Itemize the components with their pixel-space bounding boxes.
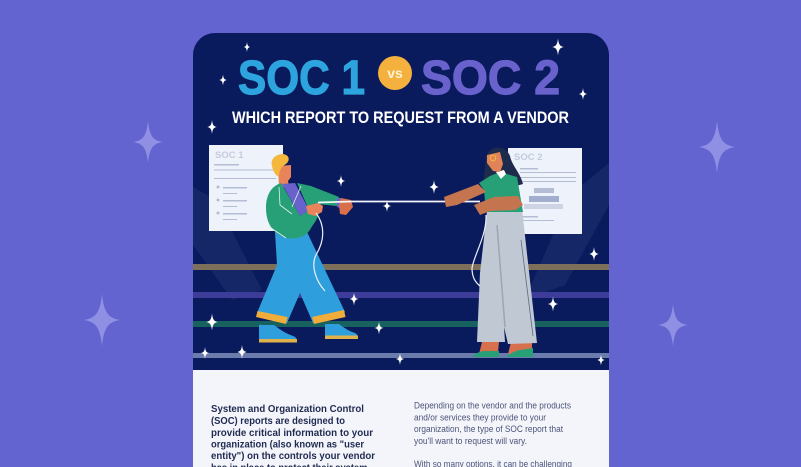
title: SOC 2: SOC 2 bbox=[421, 51, 560, 105]
subtitle: WHICH REPORT TO REQUEST FROM A VENDOR bbox=[232, 109, 569, 127]
glasses bbox=[490, 155, 496, 161]
hands bbox=[306, 203, 323, 216]
report card: SOC 2 bbox=[508, 148, 582, 234]
jeans bbox=[257, 232, 345, 323]
intro right paragraphs: you'll want to request will vary. bbox=[414, 436, 527, 446]
hair back bbox=[483, 148, 523, 186]
light beams bbox=[193, 163, 609, 300]
title: SOC 1: SOC 1 bbox=[238, 51, 365, 105]
intro right paragraphs: Depending on the vendor and the products bbox=[414, 400, 571, 410]
intro bold paragraph: (SOC) reports are designed to bbox=[211, 415, 345, 427]
panel: intro body bbox=[193, 370, 609, 467]
card bbox=[193, 33, 609, 467]
vs badge: vs bbox=[387, 65, 403, 81]
purple cuff bbox=[337, 198, 341, 208]
purple shirt bbox=[282, 183, 309, 216]
intro right paragraphs bbox=[414, 400, 572, 467]
report card: SOC 2: SOC 2 bbox=[514, 152, 543, 163]
arms bbox=[444, 184, 486, 207]
vs badge bbox=[378, 56, 412, 90]
hair bbox=[272, 154, 289, 177]
panel: hero navy bbox=[193, 33, 609, 370]
shoes bbox=[259, 324, 296, 339]
intro bold paragraph: provide critical information to your bbox=[211, 427, 373, 439]
intro right paragraphs: and/or services they provide to your bbox=[414, 412, 546, 422]
report card: SOC 1 bbox=[209, 145, 283, 231]
intro bold paragraph: organization (also known as "user bbox=[211, 438, 364, 450]
report card: SOC 1: SOC 1 bbox=[215, 150, 244, 161]
background sparkles bbox=[84, 121, 735, 346]
face bbox=[487, 152, 503, 172]
intro bold paragraph: System and Organization Control bbox=[211, 403, 364, 415]
blouse bbox=[479, 172, 523, 212]
figure: woman pulling rope bbox=[444, 148, 537, 357]
green shoes bbox=[472, 351, 499, 357]
figure: man pulling rope bbox=[256, 154, 358, 342]
collar bbox=[496, 170, 506, 179]
intro bold paragraph: entity") on the controls your vendor bbox=[211, 450, 375, 462]
sparkles bbox=[201, 38, 605, 366]
intro right paragraphs: organization, the type of SOC report that bbox=[414, 424, 563, 434]
rail stripes bbox=[193, 264, 609, 358]
slack rope bbox=[314, 213, 325, 291]
neck and face bbox=[278, 165, 291, 188]
ankles bbox=[480, 342, 499, 352]
slack rope bbox=[472, 215, 486, 286]
intro bold paragraph bbox=[211, 403, 375, 467]
jacket bbox=[266, 183, 339, 239]
pants bbox=[477, 209, 537, 344]
infographic canvas bbox=[84, 33, 734, 467]
rope bbox=[318, 202, 480, 203]
